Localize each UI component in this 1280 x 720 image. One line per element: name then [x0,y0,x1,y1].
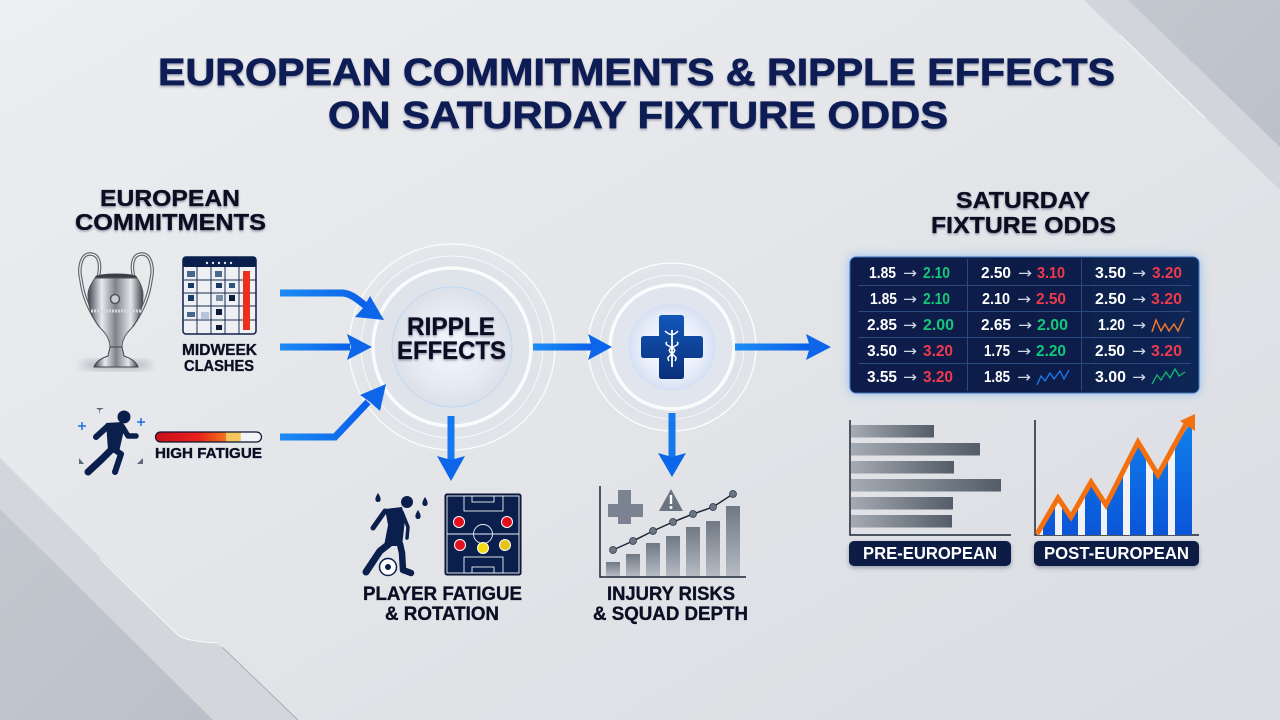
row 3: 2.85 [867,317,897,334]
row 5: 3.20 [923,369,953,386]
chart: injury risk [600,486,746,577]
label: player fatigue and rotation: PLAYER FATIGUE [363,584,522,605]
heading: Saturday fixture odds: FIXTURE ODDS [931,212,1116,238]
row 2: 1.85 [870,291,897,308]
row 1: 2.50 [981,265,1011,282]
label: ripple effects: EFFECTS [397,337,506,365]
arrow: injury to odds [735,334,831,360]
row 5: → [903,368,917,386]
label: ripple effects [397,313,506,365]
heading: Saturday fixture odds [931,187,1116,238]
row 2: → [1132,290,1146,308]
label: midweek clashes: MIDWEEK [182,342,257,359]
row 2: → [903,290,917,308]
row 4: → [1017,342,1031,360]
icon: warning triangle [659,489,683,511]
row 1: 3.20 [1152,265,1182,282]
icon: running player [78,408,145,472]
arrow: injury down to depth [658,413,686,477]
icon: tired player [366,493,428,576]
row 1: 2.10 [923,265,950,282]
row 4: 3.20 [923,343,953,360]
label: midweek clashes [182,342,257,375]
row 3: → [1132,316,1146,334]
icon: plus [608,490,643,524]
row 2: 2.10 [923,291,950,308]
row 5 [867,368,1185,386]
label: pre-European [849,541,1011,566]
row 3: → [1018,316,1032,334]
heading: Saturday fixture odds: SATURDAY [956,187,1090,213]
fatigue bar [156,432,262,442]
row 4: → [1132,342,1146,360]
title: ON SATURDAY FIXTURE ODDS [328,95,948,137]
arrow: fatigue to ripple [280,384,386,437]
label: injury risks and squad depth: INJURY RISKS [607,584,735,605]
row 1: 3.50 [1095,265,1126,282]
row 2: → [1017,290,1031,308]
odds table [850,257,1199,393]
row 2: 2.50 [1095,291,1126,308]
label: ripple effects: RIPPLE [407,313,495,341]
icon: formation pitch [445,494,521,575]
icon: medical cross [641,315,703,379]
row 2: 3.20 [1151,291,1182,308]
row 5: 3.00 [1095,369,1126,386]
row 3: → [903,316,917,334]
icon: calendar [183,257,256,334]
chart: pre-European bars [850,420,1011,535]
heading: European commitments [75,185,266,235]
row 3: 2.00 [923,317,954,334]
row 2: 2.10 [982,291,1010,308]
label: player fatigue and rotation: & ROTATION [385,604,499,625]
row 3 [867,316,1184,334]
injury circle with medical cross [587,262,757,432]
row 4: 3.50 [867,343,897,360]
row 5: 1.85 [984,369,1010,386]
row 1: 3.10 [1037,265,1065,282]
row 5: → [1017,368,1031,386]
row 5: → [1132,368,1146,386]
label: high fatigue: HIGH FATIGUE [155,445,262,462]
row 1 [869,264,1182,282]
title: EUROPEAN COMMITMENTS & RIPPLE EFFECTS [158,52,1115,94]
arrow: midweek to ripple [280,334,372,360]
row 4 [867,342,1182,360]
title [158,52,1115,137]
heading: European commitments: COMMITMENTS [75,209,266,235]
arrow: ripple down to fatigue [437,416,465,481]
icon: trophy [80,254,152,370]
row 1: 1.85 [869,265,896,282]
label: player fatigue and rotation [363,584,522,625]
label: injury risks and squad depth [593,584,748,625]
row 3: 2.65 [981,317,1011,334]
row 4: 2.50 [1095,343,1125,360]
row 4: 3.20 [1151,343,1182,360]
row 1: → [1018,264,1032,282]
row 1: → [903,264,917,282]
arrow: calendar to ripple [280,293,384,320]
row 2: 2.50 [1036,291,1066,308]
label: pre-European: PRE-EUROPEAN [863,543,997,563]
row 5: 3.55 [867,369,897,386]
label: injury risks and squad depth: & SQUAD DEPTH [593,604,748,625]
ripple effects circle [348,243,556,451]
heading: European commitments: EUROPEAN [100,185,240,211]
row 4: 2.20 [1036,343,1066,360]
row 3: 1.20 [1098,317,1125,334]
arrow: ripple to injury [533,334,612,360]
chart: post-European bars and line [1035,414,1199,535]
row 1: → [1132,264,1146,282]
row 2 [870,290,1182,308]
label: midweek clashes: CLASHES [184,358,254,375]
row 4: 1.75 [984,343,1010,360]
label: post-European: POST-EUROPEAN [1044,543,1189,563]
row 4: → [903,342,917,360]
row 3: 2.00 [1037,317,1068,334]
